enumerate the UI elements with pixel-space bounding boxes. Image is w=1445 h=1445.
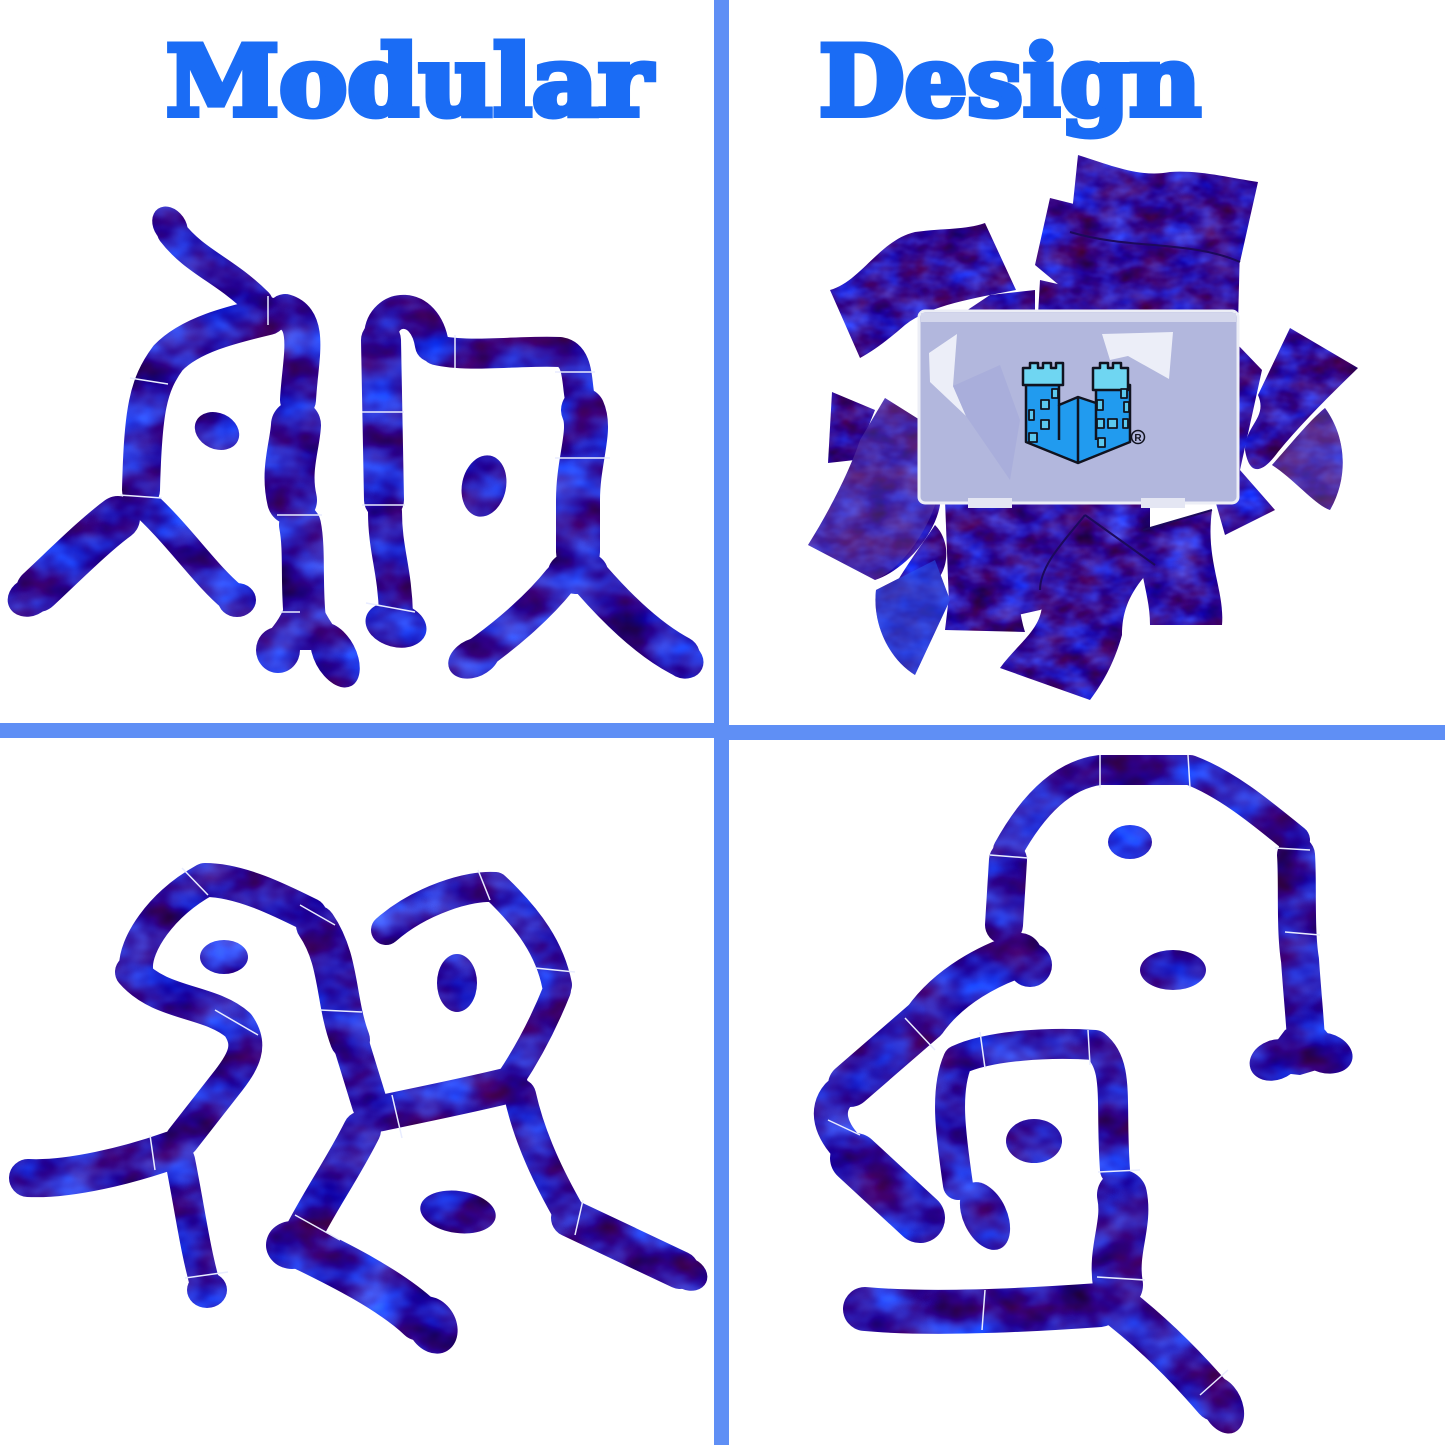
horizontal divider left [0, 723, 714, 738]
horizontal divider right [729, 725, 1445, 740]
icon: castle logo [1023, 363, 1130, 463]
piece seams [828, 755, 1320, 1395]
panel: top-right pile and box [808, 155, 1358, 700]
panel: bottom-left figures [28, 868, 713, 1363]
lilac tint on left piece [808, 398, 935, 580]
storage box [919, 311, 1238, 508]
title: Modular: Modular [166, 25, 654, 138]
shield pieces [875, 408, 1343, 675]
figure: right standing figure [360, 312, 710, 687]
registered mark [1132, 430, 1144, 444]
piece edges [1040, 232, 1240, 590]
vertical divider [714, 0, 729, 1445]
piece seams [120, 296, 610, 612]
bright tint on lower shield [875, 560, 950, 675]
figure: right running figure [266, 887, 713, 1363]
lilac tint on shield [1272, 408, 1343, 510]
panel: bottom-right figures [828, 755, 1357, 1441]
piece seams [150, 868, 583, 1278]
figure: inner figure [865, 1044, 1253, 1441]
panel: top-left figures [1, 200, 710, 696]
figure: left running figure [28, 880, 370, 1308]
figure: outer arched figure [831, 770, 1357, 1218]
registered mark: R [1134, 433, 1142, 444]
figure: left standing figure [1, 200, 370, 696]
pile of blue pieces [808, 155, 1358, 700]
title: Design: Design [819, 25, 1201, 138]
